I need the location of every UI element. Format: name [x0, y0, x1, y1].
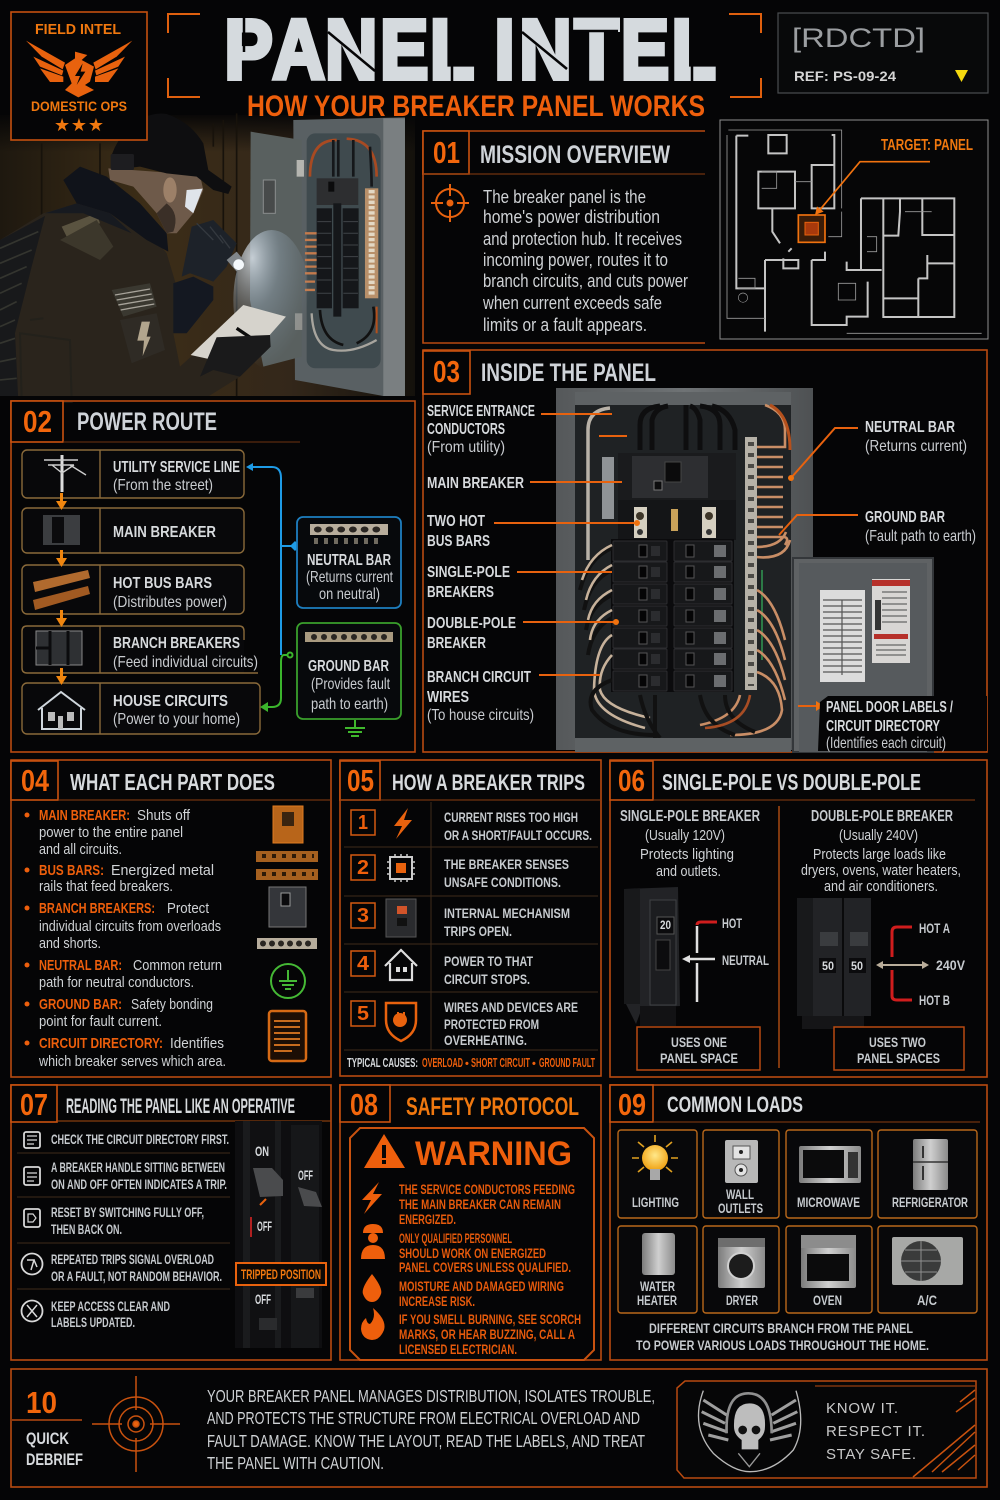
icon: flame	[361, 1308, 385, 1340]
panel 08: safety protocol	[340, 1085, 601, 1360]
mission text: incoming power, routes it to	[483, 250, 668, 270]
panel 04: what each part does: 04	[21, 763, 50, 798]
double-pole space note: USES TWO	[869, 1035, 926, 1050]
single-pole breaker	[624, 887, 680, 1026]
left callouts: BREAKERS	[427, 584, 494, 601]
double-pole text: (Usually 240V)	[839, 828, 918, 844]
tips text: CHECK THE CIRCUIT DIRECTORY FIRST.	[51, 1132, 229, 1147]
route step: hot bus bars	[22, 565, 244, 614]
step 1: 1	[358, 812, 368, 834]
double-pole wiring diagram	[876, 921, 965, 1008]
left callouts: (To house circuits)	[427, 707, 534, 724]
panel 06: single-pole vs double-pole	[610, 760, 987, 1077]
parts list: Energized metal	[111, 863, 214, 879]
load: water heater: HEATER	[637, 1293, 677, 1308]
know it box: KNOW IT.	[826, 1400, 898, 1417]
parts list: and shorts.	[39, 936, 101, 952]
step 2: 2	[357, 857, 369, 879]
load: refrigerator	[878, 1130, 977, 1218]
summary text: AND PROTECTS THE STRUCTURE FROM ELECTRICAL OVERLOAD AND	[207, 1408, 640, 1428]
breaker handle photo: OFF	[255, 1291, 271, 1307]
tips text: ON AND OFF OFTEN INDICATES A TRIP.	[51, 1177, 227, 1192]
warning text: ENERGIZED.	[399, 1212, 456, 1227]
electrical enclosure with open door	[250, 117, 405, 400]
door label callout	[818, 696, 987, 752]
step 3: INTERNAL MECHANISM	[444, 906, 570, 921]
route step: branch breakers: (Feed individual circuits)	[113, 654, 258, 671]
step 2: UNSAFE CONDITIONS.	[444, 875, 561, 890]
double-pole space note	[834, 1027, 964, 1070]
warning text: THE MAIN BREAKER CAN REMAIN	[399, 1197, 561, 1212]
typical causes: GROUND FAULT	[539, 1055, 595, 1070]
double-pole text	[801, 808, 961, 895]
summary text: FAULT DAMAGE. KNOW THE LAYOUT, READ THE LABELS, AND TREAT	[207, 1431, 645, 1451]
panel 05: how a breaker trips: 05	[347, 763, 374, 798]
know it box	[677, 1381, 976, 1478]
rating stars: ★★★	[54, 115, 104, 136]
load: oven: OVEN	[813, 1293, 842, 1308]
parts list	[38, 807, 226, 1070]
mission text: limits or a fault appears.	[483, 315, 647, 335]
load: microwave	[786, 1130, 872, 1218]
mission text: branch circuits, and cuts power	[483, 271, 688, 291]
neutral bar card: on neutral)	[319, 586, 380, 603]
lugs	[634, 507, 647, 538]
panel 08: safety protocol: 08	[350, 1087, 378, 1122]
icon: main breaker	[273, 806, 303, 843]
left callouts: (From utility)	[427, 439, 505, 456]
load: wall outlets: WALL	[726, 1187, 754, 1202]
step 4: POWER TO THAT	[444, 954, 534, 969]
parts list: NEUTRAL BAR:	[39, 957, 122, 974]
neutral bar card: NEUTRAL BAR	[307, 552, 391, 569]
neutral bar strip	[745, 437, 757, 690]
subtitle: HOW YOUR BREAKER PANEL WORKS	[247, 90, 705, 123]
single-pole text	[620, 808, 760, 880]
panel 05: how a breaker trips	[340, 760, 601, 1076]
ground bar card: (Provides fault	[311, 676, 390, 693]
panel 02: power route	[11, 401, 415, 752]
right callouts: (Returns current)	[865, 438, 967, 455]
icon: ground	[271, 964, 305, 998]
icon: reset	[24, 1209, 40, 1227]
heading: SAFETY PROTOCOL	[406, 1093, 579, 1121]
single-pole space note: PANEL SPACE	[660, 1051, 738, 1066]
breaker rows	[611, 539, 734, 692]
panel 02: power route: 02	[23, 404, 52, 439]
icon: neutral bar	[257, 938, 317, 949]
parts list: which breaker serves which area.	[38, 1054, 226, 1070]
number and label: DEBRIEF	[26, 1450, 83, 1469]
load: wall outlets: OUTLETS	[718, 1201, 763, 1216]
step 5: 5	[357, 1003, 369, 1025]
panel 09: common loads	[610, 1085, 987, 1360]
load: lighting: LIGHTING	[632, 1195, 679, 1210]
route step: main breaker	[22, 508, 244, 553]
summary text	[207, 1386, 655, 1473]
right callouts: NEUTRAL BAR	[865, 419, 955, 436]
double-pole breaker	[797, 898, 871, 1029]
single-pole text: and outlets.	[656, 864, 721, 880]
warning text: ONLY QUALIFIED PERSONNEL	[399, 1231, 512, 1246]
route step: utility: (From the street)	[113, 477, 213, 494]
operative figure	[0, 113, 286, 402]
parts list: individual circuits from overloads	[39, 919, 221, 935]
load: microwave: MICROWAVE	[797, 1195, 860, 1210]
parts list: point for fault current.	[39, 1014, 162, 1030]
step 1: CURRENT RISES TOO HIGH	[444, 810, 578, 825]
icon: warning triangle	[364, 1134, 405, 1168]
heading: INSIDE THE PANEL	[481, 359, 656, 387]
single-pole text: Protects lighting	[640, 847, 734, 863]
single-pole text: (Usually 120V)	[645, 828, 725, 844]
heading: HOW A BREAKER TRIPS	[392, 770, 585, 795]
double-pole wiring diagram: 240V	[936, 958, 965, 973]
parts list: Common return	[133, 958, 222, 974]
mission text	[482, 187, 688, 335]
icon: eagle emblem	[26, 41, 132, 97]
neutral bar card: (Returns current	[306, 569, 393, 586]
parts list: BRANCH BREAKERS:	[39, 900, 155, 917]
route step: branch breakers: BRANCH BREAKERS	[113, 635, 240, 652]
step 5: OVERHEATING.	[444, 1033, 527, 1048]
callout leader lines	[494, 414, 858, 711]
parts list: Safety bonding	[131, 997, 213, 1013]
load: wall outlets	[703, 1130, 779, 1218]
step 2: THE BREAKER SENSES	[444, 857, 569, 872]
green ground line	[260, 652, 292, 712]
step 4	[351, 950, 534, 987]
parts list: Protect	[167, 901, 209, 917]
bullet markers	[24, 812, 30, 1046]
badge: field intel	[11, 12, 147, 140]
ground bar card	[297, 623, 401, 719]
loads caption: TO POWER VARIOUS LOADS THROUGHOUT THE HOME.	[636, 1338, 929, 1353]
icon: yellow triangle	[955, 70, 968, 82]
parts list: BUS BARS:	[39, 862, 104, 879]
panel 03: inside the panel	[423, 350, 987, 752]
tips text: OR A FAULT, NOT RANDOM BEHAVIOR.	[51, 1269, 222, 1284]
double-pole breaker: 50	[851, 959, 863, 973]
service conductors	[640, 405, 735, 450]
parts list: power to the entire panel	[39, 825, 183, 841]
step 4: CIRCUIT STOPS.	[444, 972, 530, 987]
route step: main breaker: MAIN BREAKER	[113, 524, 216, 541]
step 2	[351, 854, 569, 890]
right callouts: GROUND BAR	[865, 509, 945, 526]
left callouts: WIRES	[427, 689, 469, 706]
left callouts: BRANCH CIRCUIT	[427, 669, 531, 686]
parts list: GROUND BAR:	[39, 996, 122, 1013]
load: air conditioner	[878, 1226, 977, 1313]
title: PANEL INTEL	[224, 2, 716, 97]
double-pole text: and air conditioners.	[824, 879, 938, 895]
route step: house circuits	[22, 683, 260, 734]
heading: WHAT EACH PART DOES	[70, 769, 275, 795]
step 1: OR A SHORT/FAULT OCCURS.	[444, 828, 592, 843]
tips text	[51, 1132, 229, 1330]
redacted reference box: REF: PS-09-24	[794, 68, 896, 84]
know it box: STAY SAFE.	[826, 1446, 916, 1463]
hero photo: operative inspecting breaker panel	[0, 112, 415, 402]
copper conductors to neutral bar	[756, 405, 790, 557]
typical causes: SHORT CIRCUIT	[471, 1055, 530, 1070]
single-pole wiring diagram: HOT	[722, 916, 743, 931]
door label callout: CIRCUIT DIRECTORY	[826, 718, 940, 735]
left callouts: TWO HOT	[427, 513, 485, 530]
icon: directory	[24, 1132, 40, 1148]
step 3: TRIPS OPEN.	[444, 924, 512, 939]
load: lighting	[618, 1130, 697, 1218]
single-pole breaker: 20	[660, 918, 671, 932]
redacted reference box: [RDCTD]	[792, 23, 925, 53]
redacted reference box	[778, 13, 988, 93]
panel 03: inside the panel: 03	[433, 354, 460, 389]
icon: branch breaker	[269, 887, 306, 927]
panel 04: what each part does	[11, 760, 331, 1077]
single-pole wiring diagram	[682, 916, 769, 1002]
load: water heater	[618, 1226, 697, 1313]
parts list: Shuts off	[137, 808, 191, 824]
double-pole breaker: 50	[822, 959, 834, 973]
step 3	[351, 899, 570, 939]
load: air conditioner: A/C	[917, 1293, 937, 1308]
single-pole wiring diagram: NEUTRAL	[722, 953, 769, 968]
tips text: RESET BY SWITCHING FULLY OFF,	[51, 1205, 204, 1220]
warning box: WARNING	[415, 1135, 572, 1173]
left callouts: DOUBLE-POLE	[427, 615, 516, 632]
branch circuit wires	[580, 545, 785, 738]
warning text	[399, 1182, 581, 1357]
right callouts	[865, 419, 976, 545]
panel 07: reading the panel	[11, 1085, 331, 1360]
tips text: KEEP ACCESS CLEAR AND	[51, 1299, 170, 1314]
route step: utility: UTILITY SERVICE LINE	[113, 459, 240, 476]
number and label: QUICK	[26, 1429, 70, 1448]
breaker handle photo: OFF	[257, 1218, 272, 1234]
breaker handle photo: ON	[255, 1143, 269, 1159]
warning text: IF YOU SMELL BURNING, SEE SCORCH	[399, 1312, 581, 1327]
door label callout: (Identifies each circuit)	[826, 735, 946, 752]
ground bar card: GROUND BAR	[308, 658, 389, 675]
route step: house circuits: (Power to your home)	[113, 711, 240, 728]
main breaker	[618, 453, 736, 500]
panel 09: common loads: 09	[618, 1087, 646, 1122]
mission text: and protection hub. It receives	[483, 229, 682, 249]
tips text: THEN BACK ON.	[51, 1222, 122, 1237]
orange route arrows	[56, 493, 67, 685]
warning text: LICENSED ELECTRICIAN.	[399, 1342, 517, 1357]
ground bar card: path to earth)	[311, 696, 388, 713]
tripped position tag: TRIPPED POSITION	[241, 1266, 321, 1282]
heading: READING THE PANEL LIKE AN OPERATIVE	[66, 1095, 295, 1118]
left callouts: BUS BARS	[427, 533, 490, 550]
icon: winged skull emblem	[698, 1391, 801, 1472]
load: dryer: DRYER	[726, 1293, 758, 1308]
single-pole text: SINGLE-POLE BREAKER	[620, 808, 760, 825]
breaker handle photo	[235, 1121, 322, 1348]
panel 06: single-pole vs double-pole: 06	[618, 763, 645, 798]
route step: hot bus bars: (Distributes power)	[113, 594, 227, 611]
route step: branch breakers	[22, 626, 258, 673]
breaker handle photo: OFF	[298, 1167, 313, 1183]
load: refrigerator: REFRIGERATOR	[892, 1195, 968, 1210]
icon: keep clear	[22, 1300, 42, 1322]
warning box	[350, 1128, 594, 1360]
step 5: PROTECTED FROM	[444, 1017, 539, 1032]
number and label: 10	[26, 1385, 57, 1420]
typical causes: •	[532, 1058, 536, 1070]
panel 10: quick debrief	[11, 1369, 987, 1487]
mission text: when current exceeds safe	[482, 293, 662, 313]
step 5	[351, 1000, 578, 1048]
single-pole space note: USES ONE	[671, 1035, 727, 1050]
load: dryer	[703, 1226, 779, 1313]
left callouts: BREAKER	[427, 635, 486, 652]
double-pole wiring diagram: HOT B	[919, 993, 950, 1008]
summary text: THE PANEL WITH CAUTION.	[207, 1453, 384, 1473]
icon: bus bars	[256, 851, 318, 880]
typical causes	[347, 1055, 595, 1070]
step 5: WIRES AND DEVICES ARE	[444, 1000, 578, 1015]
icon: ground symbol	[345, 720, 365, 736]
blue neutral return line	[246, 463, 300, 655]
number and label	[12, 1385, 83, 1469]
icon: bolt	[362, 1182, 382, 1214]
heading: MISSION OVERVIEW	[480, 141, 670, 169]
loads caption: DIFFERENT CIRCUITS BRANCH FROM THE PANEL	[649, 1321, 913, 1336]
route step: house circuits: HOUSE CIRCUITS	[113, 693, 228, 710]
summary text: YOUR BREAKER PANEL MANAGES DISTRIBUTION, ISOLATES TROUBLE,	[207, 1386, 655, 1406]
double-pole wiring diagram: HOT A	[919, 921, 950, 936]
parts list: CIRCUIT DIRECTORY:	[39, 1035, 163, 1052]
warning text: SHOULD WORK ON ENERGIZED	[399, 1246, 546, 1261]
parts list: path for neutral conductors.	[39, 975, 194, 991]
warning text: PANEL COVERS UNLESS QUALIFIED.	[399, 1260, 571, 1275]
route step: utility	[22, 450, 244, 498]
left callouts: MAIN BREAKER	[427, 475, 524, 492]
parts list: and all circuits.	[39, 842, 122, 858]
parts list: rails that feed breakers.	[39, 879, 173, 895]
left callouts: CONDUCTORS	[427, 421, 505, 438]
loads caption	[636, 1321, 929, 1353]
single-pole space note	[637, 1027, 760, 1070]
neutral bar card	[297, 517, 401, 608]
left callouts: SINGLE-POLE	[427, 564, 510, 581]
warning text: INCREASE RISK.	[399, 1294, 475, 1309]
title brackets	[168, 14, 761, 97]
warning text: THE SERVICE CONDUCTORS FEEDING	[399, 1182, 575, 1197]
hazard hashes	[913, 1390, 975, 1477]
step 4: 4	[357, 953, 370, 975]
icon: target reticle	[92, 1376, 180, 1472]
panel 01: mission overview	[423, 131, 705, 343]
panel photo: breaker box interior	[556, 388, 813, 752]
icon: worker	[361, 1224, 385, 1259]
badge: field intel: FIELD INTEL	[35, 21, 121, 38]
typical causes: OVERLOAD	[422, 1055, 463, 1070]
panel 07: reading the panel: 07	[20, 1087, 48, 1122]
double-pole text: DOUBLE-POLE BREAKER	[811, 808, 953, 825]
mission text: home's power distribution	[483, 207, 660, 227]
flashlight beam	[233, 230, 310, 370]
heading: COMMON LOADS	[667, 1092, 803, 1117]
tips text: LABELS UPDATED.	[51, 1315, 135, 1330]
route step: hot bus bars: HOT BUS BARS	[113, 575, 212, 592]
floor plan with target	[720, 120, 988, 339]
step 1	[351, 808, 592, 843]
parts list: MAIN BREAKER:	[39, 807, 130, 824]
badge: field intel: DOMESTIC OPS	[31, 98, 127, 114]
heading: POWER ROUTE	[77, 408, 217, 436]
tips text: A BREAKER HANDLE SITTING BETWEEN	[51, 1160, 225, 1175]
double-pole space note: PANEL SPACES	[857, 1051, 940, 1066]
icon: circuit directory	[269, 1011, 306, 1061]
panel door with labels	[793, 558, 933, 752]
know it box: RESPECT IT.	[826, 1423, 925, 1440]
typical causes: •	[465, 1058, 469, 1070]
left callouts	[427, 403, 535, 724]
mission text: The breaker panel is the	[483, 187, 646, 207]
icon: handle	[24, 1167, 40, 1185]
warning text: MARKS, OR HEAR BUZZING, CALL A	[399, 1327, 575, 1342]
step 3: 3	[357, 905, 369, 927]
icon: drop	[363, 1274, 381, 1302]
icon: crosshair	[431, 184, 469, 222]
load: water heater: WATER	[640, 1279, 675, 1294]
tips text: REPEATED TRIPS SIGNAL OVERLOAD	[51, 1252, 214, 1267]
load: oven	[786, 1226, 872, 1313]
parts list: Identifies	[170, 1036, 224, 1052]
left callouts: SERVICE ENTRANCE	[427, 403, 535, 420]
icon: repeated trips	[22, 1254, 42, 1274]
double-pole text: Protects large loads like	[813, 847, 946, 863]
tripped position tag	[236, 1263, 326, 1285]
panel 01: mission overview: 01	[433, 135, 460, 170]
typical causes: TYPICAL CAUSES:	[347, 1055, 418, 1070]
warning text: MOISTURE AND DAMAGED WIRING	[399, 1279, 564, 1294]
leader arrow to target	[818, 162, 930, 212]
double-pole text: dryers, ovens, water heaters,	[801, 863, 961, 879]
